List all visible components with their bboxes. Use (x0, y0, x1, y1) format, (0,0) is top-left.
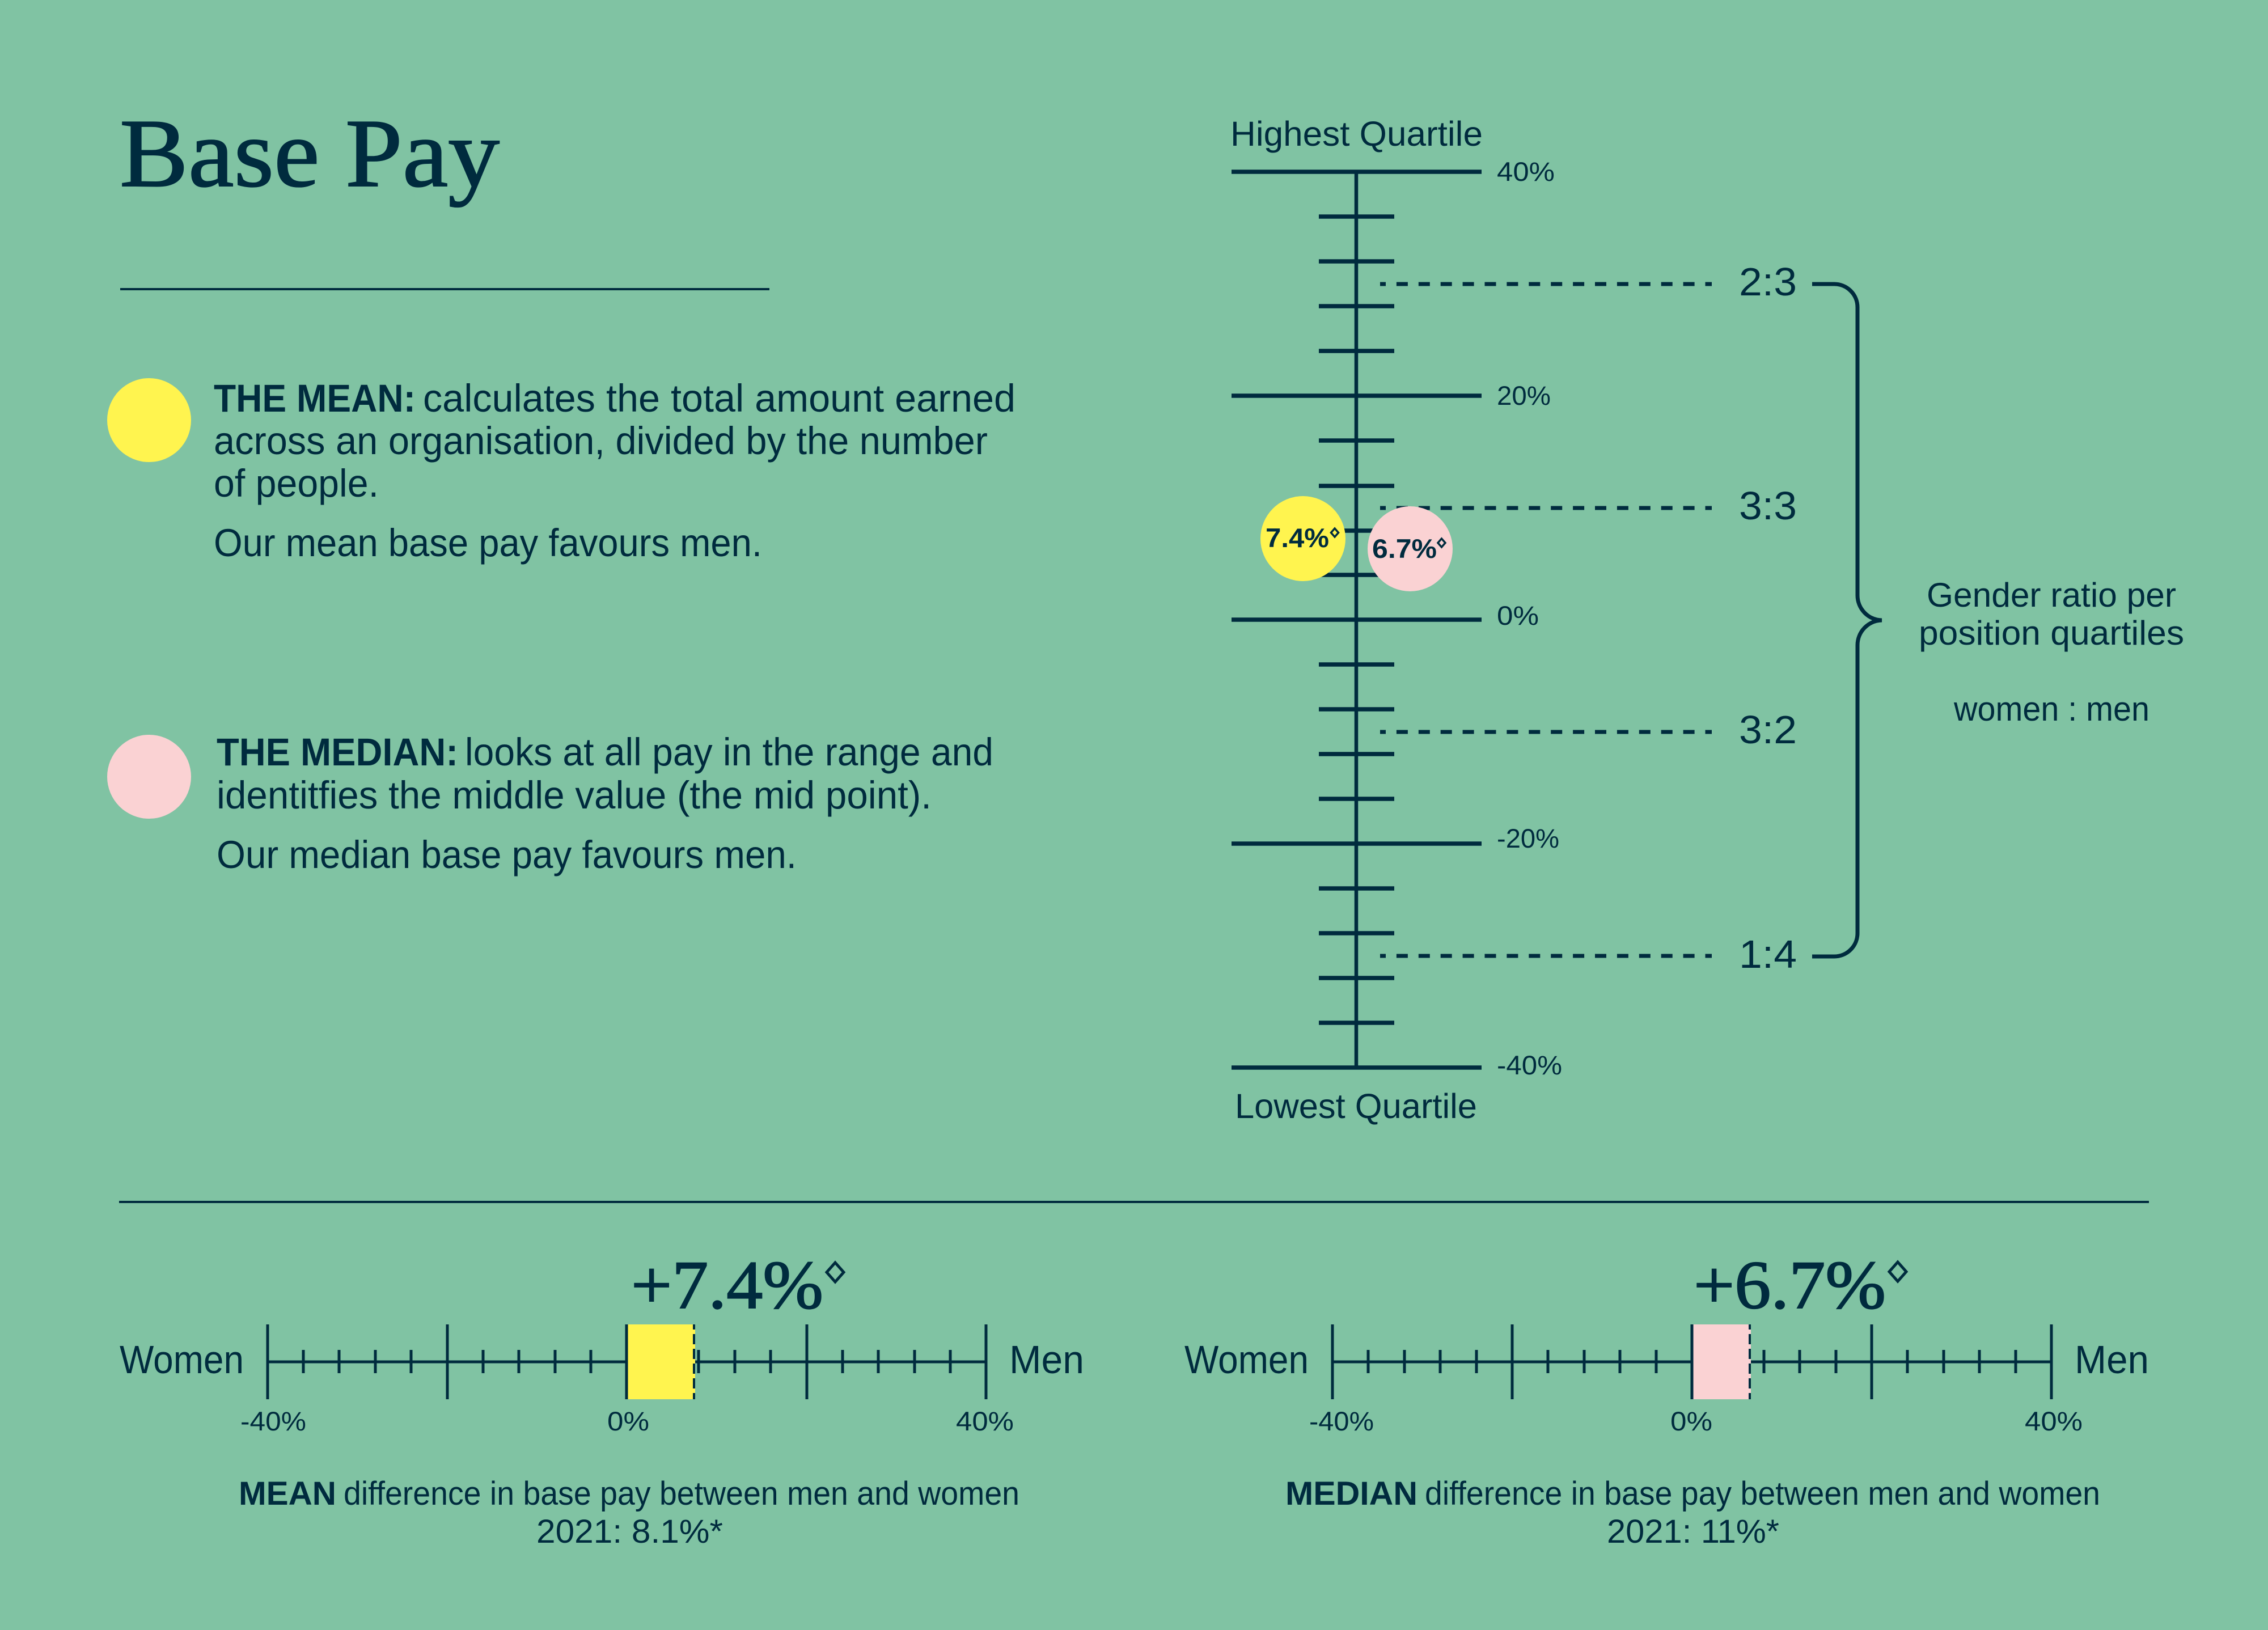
icon: pink median marker (1368, 506, 1453, 591)
scale end labels: Women (120, 1337, 244, 1382)
chart: median difference (1184, 1247, 2149, 1550)
caption: MEDIAN (1285, 1475, 1417, 1512)
yellow difference bar (627, 1324, 695, 1399)
big value: +6.7% (1694, 1247, 1886, 1323)
icon: pink median marker: 6.7% (1372, 534, 1437, 564)
scale percent labels: 0% (607, 1406, 649, 1436)
chart: median difference: Men (2075, 1337, 2149, 1382)
ratio labels: 1:4 (1739, 932, 1797, 976)
caption: MEAN (239, 1475, 336, 1512)
chart: mean difference: Men (1009, 1337, 1084, 1382)
scale percent labels: 40% (1497, 156, 1555, 187)
text block: median definition (217, 730, 993, 877)
chart: mean difference (120, 1247, 1084, 1550)
icon: yellow mean dot (107, 378, 191, 462)
scale percent labels: 40% (2025, 1406, 2083, 1436)
caption (239, 1475, 1019, 1550)
caption: difference in base pay between men and women (344, 1475, 1019, 1512)
scale percent labels: 20% (1497, 380, 1551, 410)
scale percent labels (1497, 156, 1562, 1080)
ratio legend: women : men (1953, 690, 2149, 728)
scale percent labels: 0% (1497, 600, 1539, 630)
scale percent labels: -40% (1309, 1406, 1374, 1436)
scale percent labels: -40% (240, 1406, 306, 1436)
text block: mean definition: across an organisation, divided by the number (214, 419, 988, 463)
ratio legend: Gender ratio per (1927, 576, 2176, 614)
text block: mean definition: Our mean base pay favours men. (214, 521, 762, 565)
text block: median definition: looks at all pay in the range and (465, 730, 993, 774)
icon: yellow mean marker (1260, 496, 1345, 581)
brace (1812, 284, 1882, 956)
scale (1332, 1324, 2051, 1399)
scale heading: highest quartile: Highest Quartile (1230, 115, 1483, 153)
text block: mean definition: calculates the total amount earned (423, 376, 1015, 420)
title: Base Pay (120, 100, 500, 208)
scale percent labels: 40% (956, 1406, 1014, 1436)
scale end labels: Women (1184, 1337, 1309, 1382)
caption: 2021: 8.1%* (536, 1513, 723, 1550)
icon: yellow mean marker: 7.4% (1266, 523, 1329, 553)
scale percent labels (1309, 1406, 2083, 1436)
ratio labels: 3:2 (1739, 708, 1797, 752)
big value: +7.4% (631, 1247, 823, 1323)
caption: 2021: 11%* (1607, 1513, 1779, 1550)
text block: mean definition (214, 376, 1015, 565)
text block: median definition: identitfies the middle value (the mid point). (217, 773, 932, 817)
dashed leader lines (1380, 284, 1712, 956)
text block: mean definition: of people. (214, 462, 379, 505)
icon: pink median dot (107, 735, 191, 819)
caption (1285, 1475, 2100, 1550)
ratio legend (1919, 576, 2184, 728)
ratio legend: position quartiles (1919, 614, 2184, 652)
scale percent labels: 0% (1670, 1406, 1712, 1436)
chart: quartile scale (1230, 115, 2184, 1125)
panel: median explanation (107, 730, 993, 877)
pink difference bar (1692, 1324, 1751, 1399)
ratio labels: 2:3 (1739, 260, 1797, 304)
icon: diamond (1889, 1262, 1906, 1281)
scale percent labels: -20% (1497, 823, 1559, 853)
ratio labels: 3:3 (1739, 484, 1797, 528)
ratio labels (1739, 260, 1797, 976)
caption: difference in base pay between men and women (1425, 1475, 2100, 1512)
scale heading: lowest quartile: Lowest Quartile (1235, 1087, 1477, 1125)
scale (268, 1324, 986, 1399)
text block: median definition: THE MEDIAN: (217, 730, 458, 774)
scale percent labels: -40% (1497, 1050, 1562, 1080)
text block: median definition: Our median base pay favours men. (217, 833, 797, 877)
icon: diamond (827, 1263, 844, 1282)
scale percent labels (240, 1406, 1014, 1436)
panel: mean explanation (107, 376, 1015, 565)
scale axis and ticks (1232, 172, 1482, 1068)
text block: mean definition: THE MEAN: (214, 376, 416, 420)
